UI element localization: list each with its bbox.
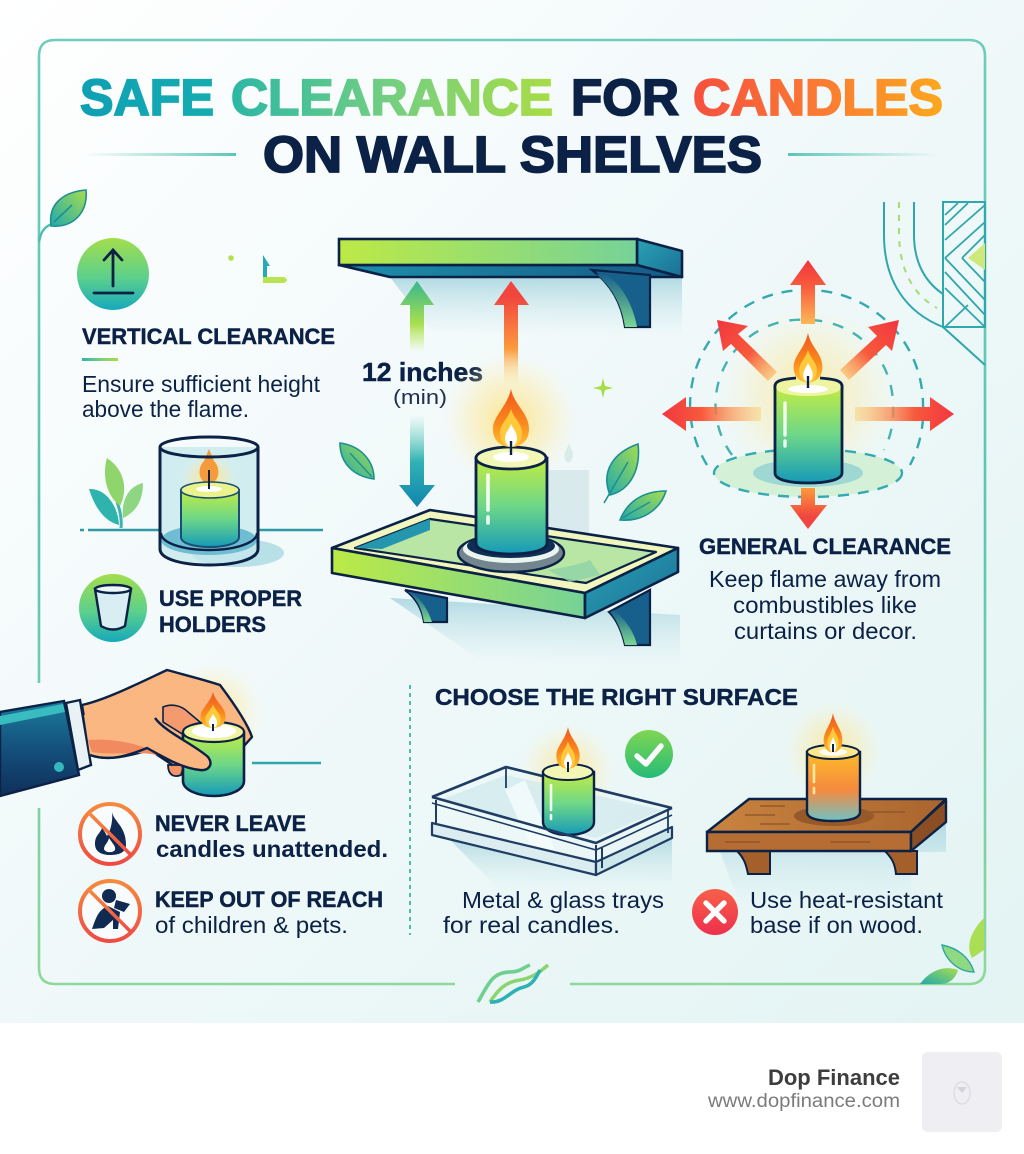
ghost candle	[549, 443, 589, 535]
label	[155, 887, 383, 938]
arrow: 12 inch up	[400, 281, 434, 352]
lower shelf	[332, 510, 680, 665]
arrow: up	[790, 260, 826, 324]
caption: heat-resistant base: Use heat-resistant	[750, 887, 944, 913]
body text: curtains or decor.	[734, 618, 917, 644]
body text: combustibles like	[733, 592, 917, 618]
item: use proper holders	[79, 574, 302, 642]
clearance diagram	[662, 260, 954, 529]
measurement label: 12 inches	[362, 357, 483, 387]
body text: Ensure sufficient height	[82, 371, 321, 397]
caption: heat-resistant base: base if on wood.	[750, 912, 923, 938]
footer brand: Dop Finance	[768, 1065, 900, 1090]
caption: heat-resistant base	[750, 887, 944, 938]
wooden shelf with candle	[707, 700, 946, 905]
caption: metal and glass	[443, 887, 664, 938]
icon: corner leaf top-left	[39, 190, 86, 242]
icon: check	[625, 730, 673, 778]
icon: cross	[692, 889, 738, 935]
icon: no child and pet	[80, 881, 140, 941]
arrow: right	[855, 397, 954, 431]
footer brand: www.dopfinance.com	[707, 1091, 900, 1112]
icon: corner leaves bottom-right	[920, 918, 984, 984]
outer frame	[39, 40, 985, 984]
title	[80, 69, 943, 183]
title: SAFE	[80, 69, 214, 126]
arrow: down	[790, 488, 827, 529]
icon: upward arrow	[77, 238, 149, 310]
panel: general clearance	[662, 260, 954, 644]
body text: above the flame.	[82, 396, 249, 422]
label: HOLDERS	[159, 612, 266, 637]
footer brand	[707, 1065, 900, 1112]
panel: vertical clearance	[77, 238, 335, 422]
label: USE PROPER	[159, 586, 302, 611]
label	[155, 811, 388, 862]
footer band	[0, 1023, 1024, 1154]
arrow: left	[662, 397, 761, 431]
label: KEEP OUT OF REACH	[155, 887, 383, 912]
warning: never leave	[80, 804, 388, 864]
footer logo tile	[922, 1052, 1002, 1132]
title: FOR	[571, 69, 679, 126]
arrow: heat rising	[494, 281, 529, 385]
title: CANDLES	[693, 69, 943, 126]
measurement label	[362, 357, 483, 409]
arrow: 12 inch down	[399, 415, 435, 507]
icon: glass	[79, 574, 147, 642]
arrow: up-right	[840, 320, 899, 380]
candle with flame	[442, 352, 578, 572]
caption: metal and glass: Metal & glass trays	[462, 887, 664, 913]
body text	[82, 371, 321, 422]
decoration: top right pattern	[884, 202, 985, 365]
label: of children & pets.	[155, 912, 348, 938]
heading: CHOOSE THE RIGHT SURFACE	[435, 684, 798, 710]
panel: choose the right surface	[432, 684, 946, 938]
decorative marks	[228, 255, 287, 283]
icon: leaves and sparkle	[340, 378, 666, 520]
label: NEVER LEAVE	[155, 811, 306, 836]
warning: keep out of reach	[80, 881, 383, 941]
candle in glass holder	[80, 437, 323, 567]
measurement label: (min)	[393, 387, 447, 409]
caption: metal and glass: for real candles.	[443, 912, 620, 938]
label	[159, 586, 302, 637]
icon: bottom wave emblem	[478, 965, 548, 1002]
heading: VERTICAL CLEARANCE	[82, 324, 335, 349]
body text	[709, 566, 941, 644]
title: CLEARANCE	[231, 69, 553, 126]
icon: no fire	[80, 804, 140, 864]
heading: GENERAL CLEARANCE	[699, 534, 951, 559]
hand holding candle	[0, 662, 321, 796]
upper shelf	[339, 239, 682, 337]
label: candles unattended.	[156, 836, 388, 862]
body text: Keep flame away from	[709, 566, 941, 592]
shelf illustration with candle	[332, 239, 682, 665]
arrow: up-left	[717, 320, 777, 381]
title: ON WALL SHELVES	[263, 126, 762, 183]
glass tray with candle	[432, 722, 672, 890]
candle	[775, 386, 842, 483]
